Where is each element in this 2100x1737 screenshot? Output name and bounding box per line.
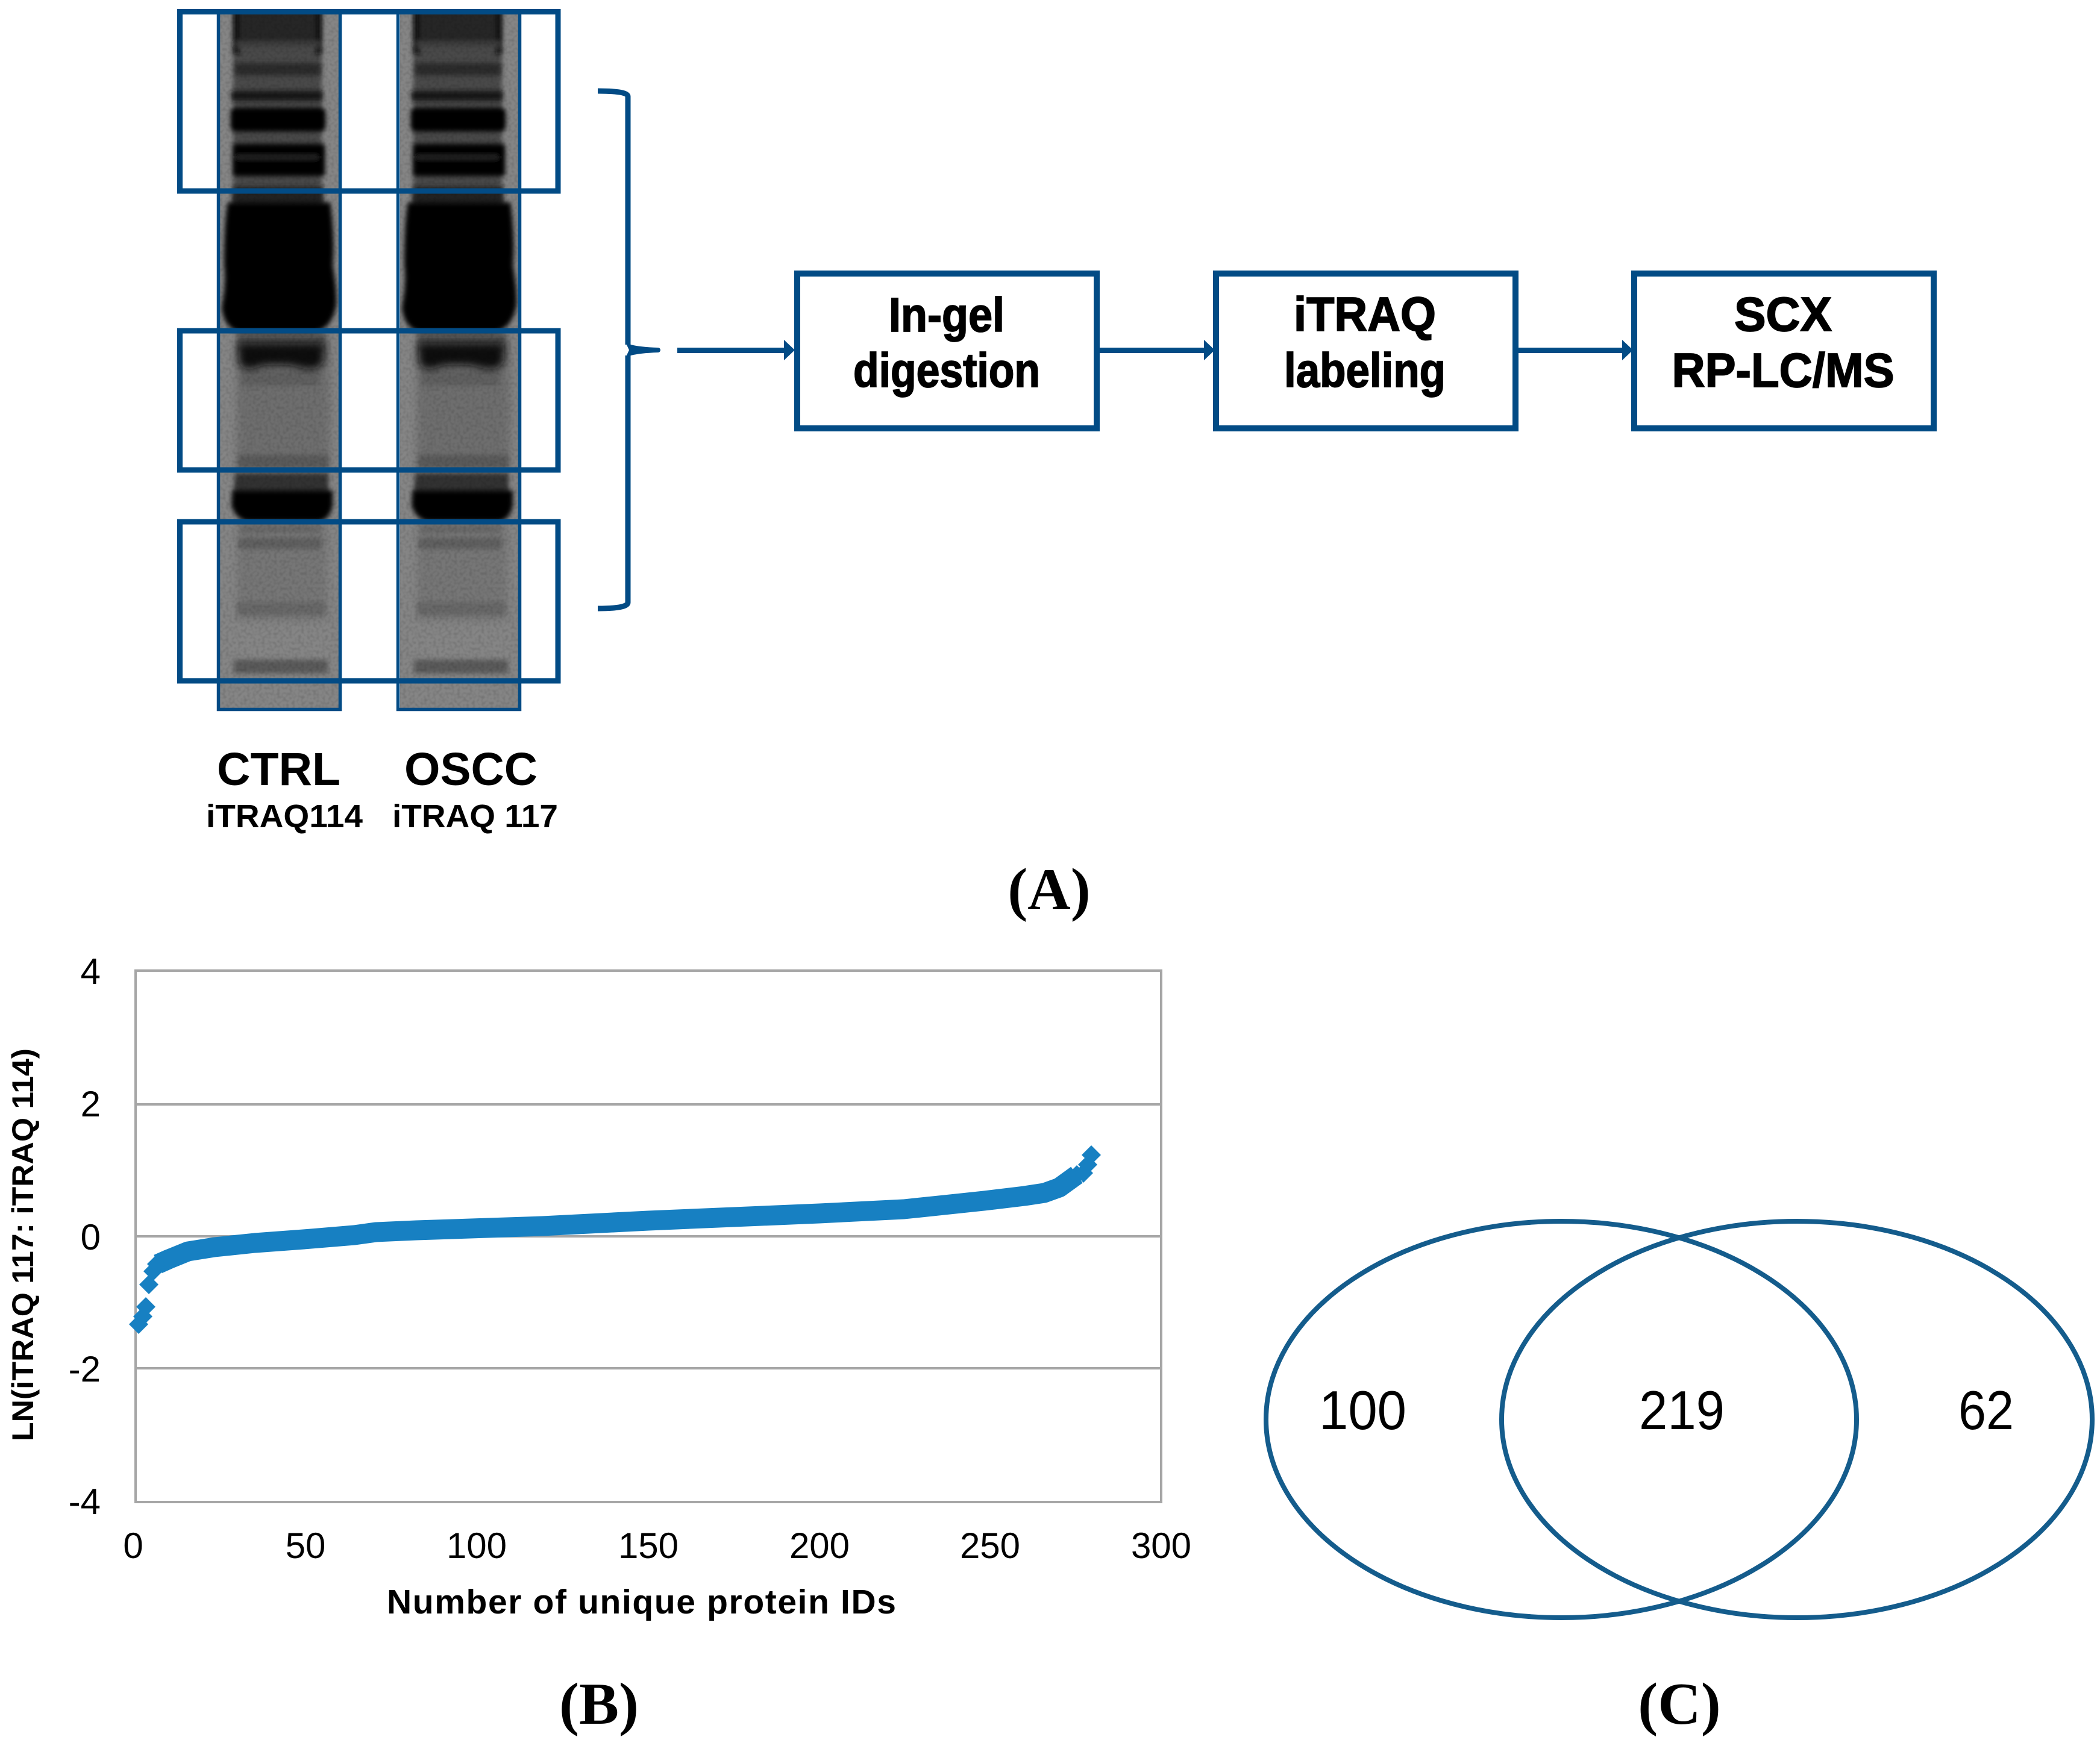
box: SCX RP-LC/MS: RP-LC/MS xyxy=(1672,343,1895,397)
y axis title: LN(iTRAQ 117: iTRAQ 114) xyxy=(6,1048,40,1441)
panel C: Venn diagram xyxy=(1266,1221,2092,1737)
x axis title: Number of unique protein IDs xyxy=(387,1583,896,1621)
gel lane: CTRL xyxy=(220,6,339,709)
panel letter A: (A) xyxy=(1008,857,1091,922)
gel region box 1 xyxy=(180,12,558,191)
label: CTRL iTRAQ114: iTRAQ114 xyxy=(206,798,363,834)
count: shared: 219 xyxy=(1639,1380,1725,1441)
y axis tick labels: 0 xyxy=(81,1217,101,1257)
left ellipse xyxy=(1266,1221,1857,1618)
x axis tick labels: 100 xyxy=(447,1526,507,1566)
label: OSCC iTRAQ 117: iTRAQ 117 xyxy=(392,798,558,834)
label: CTRL iTRAQ114: CTRL xyxy=(217,743,340,795)
data series: sorted protein ratios xyxy=(129,1145,1101,1334)
box: In-gel digestion: digestion xyxy=(853,343,1040,397)
x axis tick labels xyxy=(123,1526,1191,1566)
y axis tick labels: -4 xyxy=(69,1482,101,1522)
gel region box 2 xyxy=(180,331,558,470)
plot frame and grid xyxy=(136,971,1161,1502)
gel lane: OSCC xyxy=(400,6,519,709)
panel A: gel and workflow xyxy=(180,6,1934,922)
right ellipse xyxy=(1502,1221,2092,1618)
box: In-gel digestion: In-gel xyxy=(889,288,1005,342)
label: CTRL iTRAQ114 xyxy=(206,743,363,834)
box: SCX RP-LC/MS xyxy=(1634,274,1934,428)
x axis tick labels: 250 xyxy=(960,1526,1020,1566)
box: iTRAQ labeling: labeling xyxy=(1284,343,1446,397)
x axis tick labels: 0 xyxy=(123,1526,143,1566)
y axis tick labels xyxy=(69,951,101,1522)
x axis tick labels: 50 xyxy=(286,1526,325,1566)
gel lane outlines xyxy=(218,12,519,710)
bracket xyxy=(598,91,660,609)
y axis tick labels: -2 xyxy=(69,1349,101,1389)
box: SCX RP-LC/MS: SCX xyxy=(1734,287,1832,341)
panel letter C: (C) xyxy=(1638,1671,1721,1737)
arrow to iTRAQ labeling xyxy=(1098,340,1215,360)
label: OSCC iTRAQ 117 xyxy=(392,743,558,834)
panel letter B: (B) xyxy=(559,1671,639,1737)
x axis tick labels: 200 xyxy=(789,1526,850,1566)
x axis tick labels: 150 xyxy=(618,1526,679,1566)
box: iTRAQ labeling: iTRAQ xyxy=(1294,287,1436,341)
box: iTRAQ labeling xyxy=(1216,274,1515,428)
y axis tick labels: 2 xyxy=(81,1084,101,1124)
label: OSCC iTRAQ 117: OSCC xyxy=(404,743,538,795)
gel region box 3 xyxy=(180,522,558,681)
count: right only: 62 xyxy=(1958,1380,2014,1441)
y axis tick labels: 4 xyxy=(81,951,101,992)
box: In-gel digestion xyxy=(797,274,1097,428)
count: left only: 100 xyxy=(1319,1380,1406,1441)
arrow to in-gel digestion xyxy=(677,340,795,360)
arrow to SCX RP-LC/MS xyxy=(1516,340,1633,360)
panel B: scatter chart xyxy=(6,951,1191,1737)
x axis tick labels: 300 xyxy=(1131,1526,1191,1566)
